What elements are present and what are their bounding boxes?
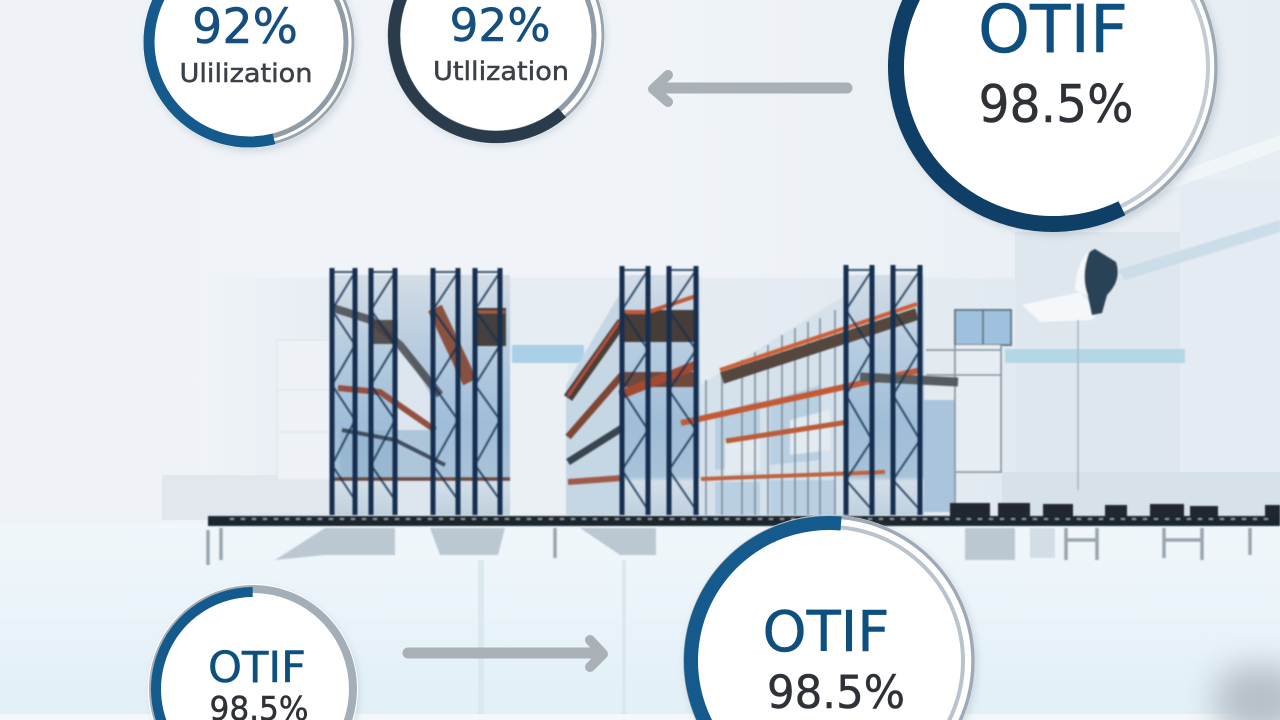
icon: ceiling camera [1075, 249, 1118, 315]
value: 98.5%: 98.5% [767, 666, 905, 719]
value: 92%: 92% [192, 0, 298, 55]
racks: shelf beams with orange edges [332, 296, 958, 482]
back shelving and windows, right side [700, 295, 1011, 515]
value: 98.5%: 98.5% [978, 75, 1134, 135]
label: OTIF: OTIF [208, 643, 306, 693]
light blue wall stripes [512, 345, 1185, 363]
floor [0, 524, 1280, 720]
label: utilization: Utllization [433, 57, 569, 87]
KPI gauge: OTIF 98.5%, bottom centre [669, 501, 989, 720]
arrow: pointing right [408, 640, 603, 667]
KPI gauge: OTIF 98.5%, top right [843, 0, 1263, 277]
label: utilization: Ulilization [180, 59, 312, 89]
arrow: pointing left [653, 75, 847, 102]
ghost shelving at left [277, 340, 332, 480]
racks: pallet loads behind frames [332, 275, 924, 515]
KPI gauge: 92% utilization, dark [352, 0, 640, 179]
label: OTIF: OTIF [762, 600, 890, 665]
value: 92%: 92% [450, 0, 550, 52]
conveyor line with boxes and legs [208, 503, 1280, 565]
KPI gauge: OTIF 98.5%, bottom left [134, 570, 372, 720]
racks: blue upright frames with cross bracing [332, 265, 920, 515]
KPI gauge: 92% utilization, blue [128, 0, 370, 163]
ceiling light beam [1022, 220, 1280, 490]
